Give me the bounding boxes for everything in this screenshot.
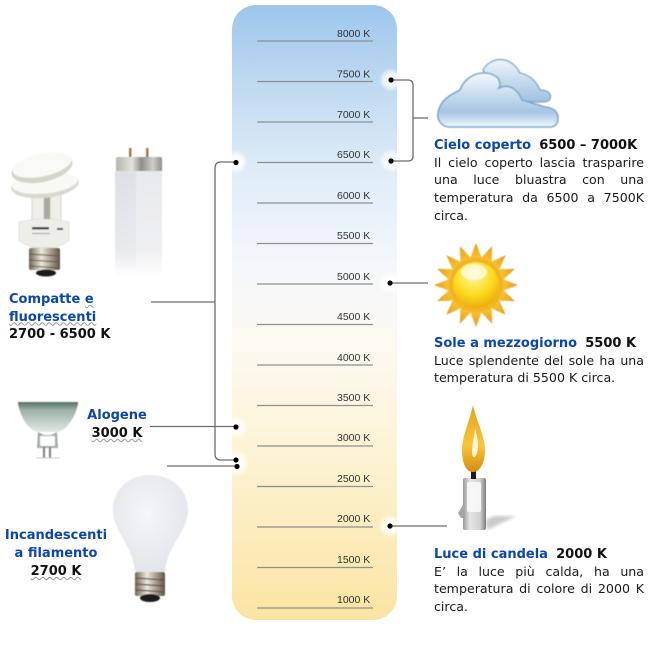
label: halogen: 3000 K bbox=[92, 426, 142, 441]
text block: candle light: Luce di candela 2000 K bbox=[434, 547, 607, 562]
label: compact and fluorescent: fluorescenti bbox=[9, 310, 96, 324]
scale lines and kelvin labels: 4000 K bbox=[337, 352, 370, 364]
connector: cloudy sky bbox=[388, 77, 428, 164]
label: halogen bbox=[87, 408, 147, 442]
scale lines and kelvin labels: 1500 K bbox=[337, 554, 370, 566]
label: compact and fluorescent bbox=[9, 292, 111, 342]
connector: lamp types to scale bbox=[150, 160, 240, 469]
scale lines and kelvin labels: 6000 K bbox=[337, 190, 370, 202]
text block: candle light: temperatura di colore di 2000 K bbox=[434, 581, 644, 596]
icon: cloud bbox=[438, 60, 558, 127]
text block: cloudy sky: temperatura da 6500 a 7500K bbox=[434, 190, 644, 205]
connector: candle bbox=[387, 523, 447, 529]
scale lines and kelvin labels: 6500 K bbox=[337, 149, 370, 161]
panel: colour temperature scale bbox=[222, 5, 403, 620]
scale lines and kelvin labels: 2500 K bbox=[337, 473, 370, 485]
icon: halogen lamp bbox=[18, 402, 78, 458]
label: incandescent: Incandescenti bbox=[5, 528, 107, 543]
connector: sun bbox=[387, 280, 428, 286]
text block: cloudy sky: Il cielo coperto lascia trasparire bbox=[434, 155, 644, 170]
scale lines and kelvin labels: 3000 K bbox=[337, 432, 370, 444]
scale lines and kelvin labels: 2000 K bbox=[337, 513, 370, 525]
text block: noon sun bbox=[434, 336, 644, 385]
text block: candle light: circa. bbox=[434, 599, 468, 614]
scale lines and kelvin labels: 5000 K bbox=[337, 271, 370, 283]
text block: noon sun: Luce splendente del sole ha una bbox=[434, 353, 644, 368]
scale lines and kelvin labels bbox=[257, 28, 373, 608]
scale lines and kelvin labels: 4500 K bbox=[337, 311, 370, 323]
scale lines and kelvin labels: 1000 K bbox=[337, 594, 370, 606]
label: incandescent: 2700 K bbox=[31, 564, 81, 579]
icon: incandescent bulb bbox=[113, 475, 188, 602]
scale lines and kelvin labels: 3500 K bbox=[337, 392, 370, 404]
icon: compact fluorescent bulb bbox=[9, 148, 80, 276]
text block: cloudy sky: Cielo coperto 6500 – 7000K bbox=[434, 138, 637, 153]
scale lines and kelvin labels: 7000 K bbox=[337, 109, 370, 121]
icon: fluorescent tube bbox=[115, 148, 162, 277]
text block: cloudy sky bbox=[434, 138, 644, 223]
text block: noon sun: temperatura di 5500 K circa. bbox=[434, 370, 615, 385]
label: compact and fluorescent: 2700 - 6500 K bbox=[9, 327, 110, 342]
text block: noon sun: Sole a mezzogiorno 5500 K bbox=[434, 336, 636, 351]
label: compact and fluorescent: Compatte e bbox=[9, 292, 94, 307]
scale lines and kelvin labels: 8000 K bbox=[337, 28, 370, 40]
text block: cloudy sky: una luce bluastra con una bbox=[434, 172, 644, 187]
scale lines and kelvin labels: 7500 K bbox=[337, 68, 370, 80]
label: halogen: Alogene bbox=[87, 408, 147, 423]
icon: sun bbox=[434, 243, 518, 327]
text block: candle light: E’ la luce più calda, ha una bbox=[434, 564, 644, 579]
text block: cloudy sky: circa. bbox=[434, 208, 468, 223]
label: incandescent: a filamento bbox=[15, 546, 97, 561]
scale lines and kelvin labels: 5500 K bbox=[337, 230, 370, 242]
text block: candle light bbox=[434, 547, 644, 614]
label: incandescent bbox=[5, 528, 107, 580]
icon: candle bbox=[458, 405, 516, 530]
